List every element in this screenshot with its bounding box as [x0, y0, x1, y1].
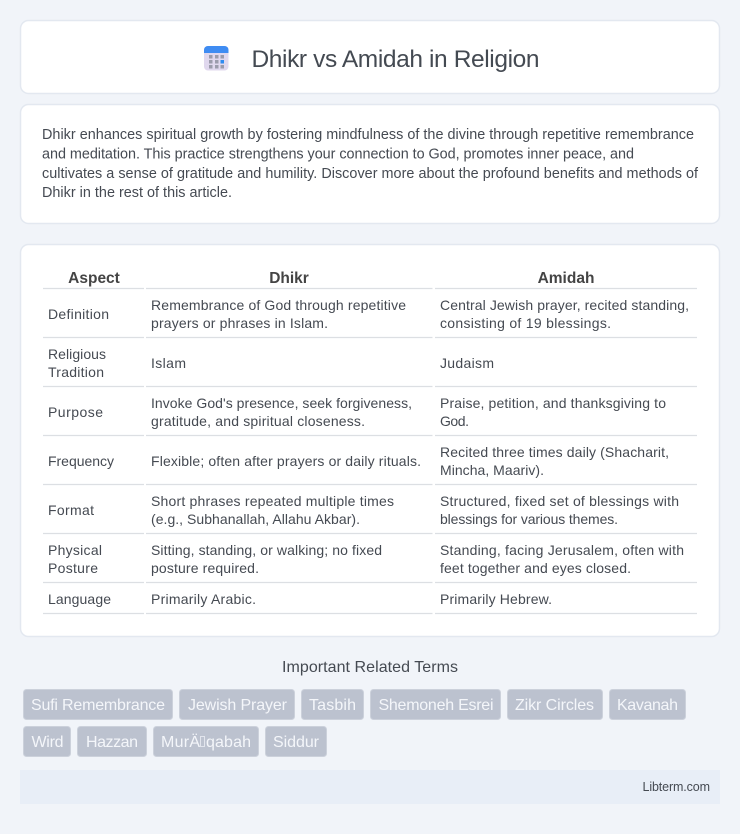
- tag: [370, 690, 500, 720]
- row: purpose: Purpose: [48, 404, 103, 420]
- row: language: [48, 591, 552, 607]
- tag: [266, 726, 326, 756]
- icon: calendar: [204, 46, 228, 70]
- tag: Kavanah: [617, 697, 678, 714]
- row: religious tradition: [48, 346, 494, 380]
- row: format: Structured, fixed set of blessings with: [440, 493, 679, 509]
- tag: [154, 726, 258, 756]
- tag: Wird: [32, 734, 64, 751]
- row: religious tradition: Judaism: [440, 355, 494, 371]
- row: definition: Central Jewish prayer, recited standing,: [440, 297, 689, 313]
- footer: Libterm.com: [642, 780, 710, 794]
- row: format: Format: [48, 502, 94, 518]
- table header: Dhikr: [269, 270, 309, 287]
- row: physical posture: [48, 542, 684, 576]
- related term tags: [24, 690, 686, 756]
- tag: [610, 690, 686, 720]
- row: frequency: Recited three times daily (Shacharit,: [440, 444, 669, 460]
- tag: qabah: [206, 734, 251, 751]
- tag: [302, 690, 364, 720]
- tag: Shemoneh Esrei: [378, 697, 494, 714]
- tag: [180, 690, 294, 720]
- panel: header: [20, 20, 720, 94]
- tag: [24, 690, 172, 720]
- tag: [24, 726, 70, 756]
- row: physical posture: Physical: [48, 542, 102, 558]
- tag: Tasbih: [309, 697, 356, 714]
- tag: Jewish Prayer: [188, 697, 288, 714]
- table header: [68, 270, 594, 287]
- row: religious tradition: Islam: [151, 355, 186, 371]
- row: physical posture: Sitting, standing, or walking; no fixed: [151, 542, 382, 558]
- row: definition: [48, 297, 689, 331]
- row: language: Language: [48, 591, 111, 607]
- row: format: [48, 493, 679, 527]
- table header: Aspect: [68, 270, 120, 287]
- row: definition: Remembrance of God through repetitive: [151, 297, 406, 313]
- row: purpose: Praise, petition, and thanksgiving to: [440, 395, 666, 411]
- row: frequency: Mincha, Maariv).: [440, 462, 544, 478]
- table header: Amidah: [538, 270, 594, 287]
- row: definition: Definition: [48, 306, 109, 322]
- tag: MurÄ: [161, 733, 200, 751]
- row: format: (e.g., Subhanallah, Allahu Akbar).: [151, 511, 360, 527]
- tag: [78, 726, 146, 756]
- tag: [508, 690, 602, 720]
- row: physical posture: Posture: [48, 560, 98, 576]
- row: purpose: God.: [440, 413, 469, 429]
- row: purpose: gratitude, and spiritual closeness.: [151, 413, 365, 429]
- row: religious tradition: Religious: [48, 346, 106, 362]
- row: language: Primarily Hebrew.: [440, 591, 552, 607]
- description text: [42, 127, 699, 201]
- panel: comparison table: [20, 244, 720, 636]
- tag: Zikr Circles: [515, 697, 594, 714]
- row: definition: consisting of 19 blessings.: [440, 315, 611, 331]
- tag: Sufi Remembrance: [31, 697, 165, 714]
- footer: [20, 770, 720, 804]
- description text: Dhikr enhances spiritual growth by fostering mindfulness of the divine through repetitive remembrance: [42, 127, 694, 143]
- row: frequency: [48, 444, 669, 478]
- row: format: blessings for various themes.: [440, 511, 618, 527]
- title: Dhikr vs Amidah in Religion: [252, 46, 540, 73]
- description text: Dhikr in the rest of this article.: [42, 185, 232, 201]
- heading: important related terms: Important Related Terms: [282, 659, 458, 676]
- description text: cultivates a sense of gratitude and humility. Discover more about the profound benefits and methods of: [42, 166, 699, 182]
- tag: Hazzan: [86, 734, 138, 751]
- row: physical posture: posture required.: [151, 560, 259, 576]
- description text: and meditation. This practice strengthens your connection to God, promotes inner peace, and: [42, 146, 634, 162]
- panel: description: [20, 104, 720, 224]
- tag: Siddur: [273, 734, 320, 751]
- row: definition: prayers or phrases in Islam.: [151, 315, 328, 331]
- row: purpose: [48, 395, 666, 429]
- row: religious tradition: Tradition: [48, 364, 104, 380]
- row: physical posture: Standing, facing Jerusalem, often with: [440, 542, 684, 558]
- row: physical posture: feet together and eyes closed.: [440, 560, 631, 576]
- row: frequency: Frequency: [48, 453, 114, 469]
- row: purpose: Invoke God's presence, seek forgiveness,: [151, 395, 412, 411]
- row: frequency: Flexible; often after prayers or daily rituals.: [151, 453, 421, 469]
- row: language: Primarily Arabic.: [151, 591, 256, 607]
- row: format: Short phrases repeated multiple times: [151, 493, 394, 509]
